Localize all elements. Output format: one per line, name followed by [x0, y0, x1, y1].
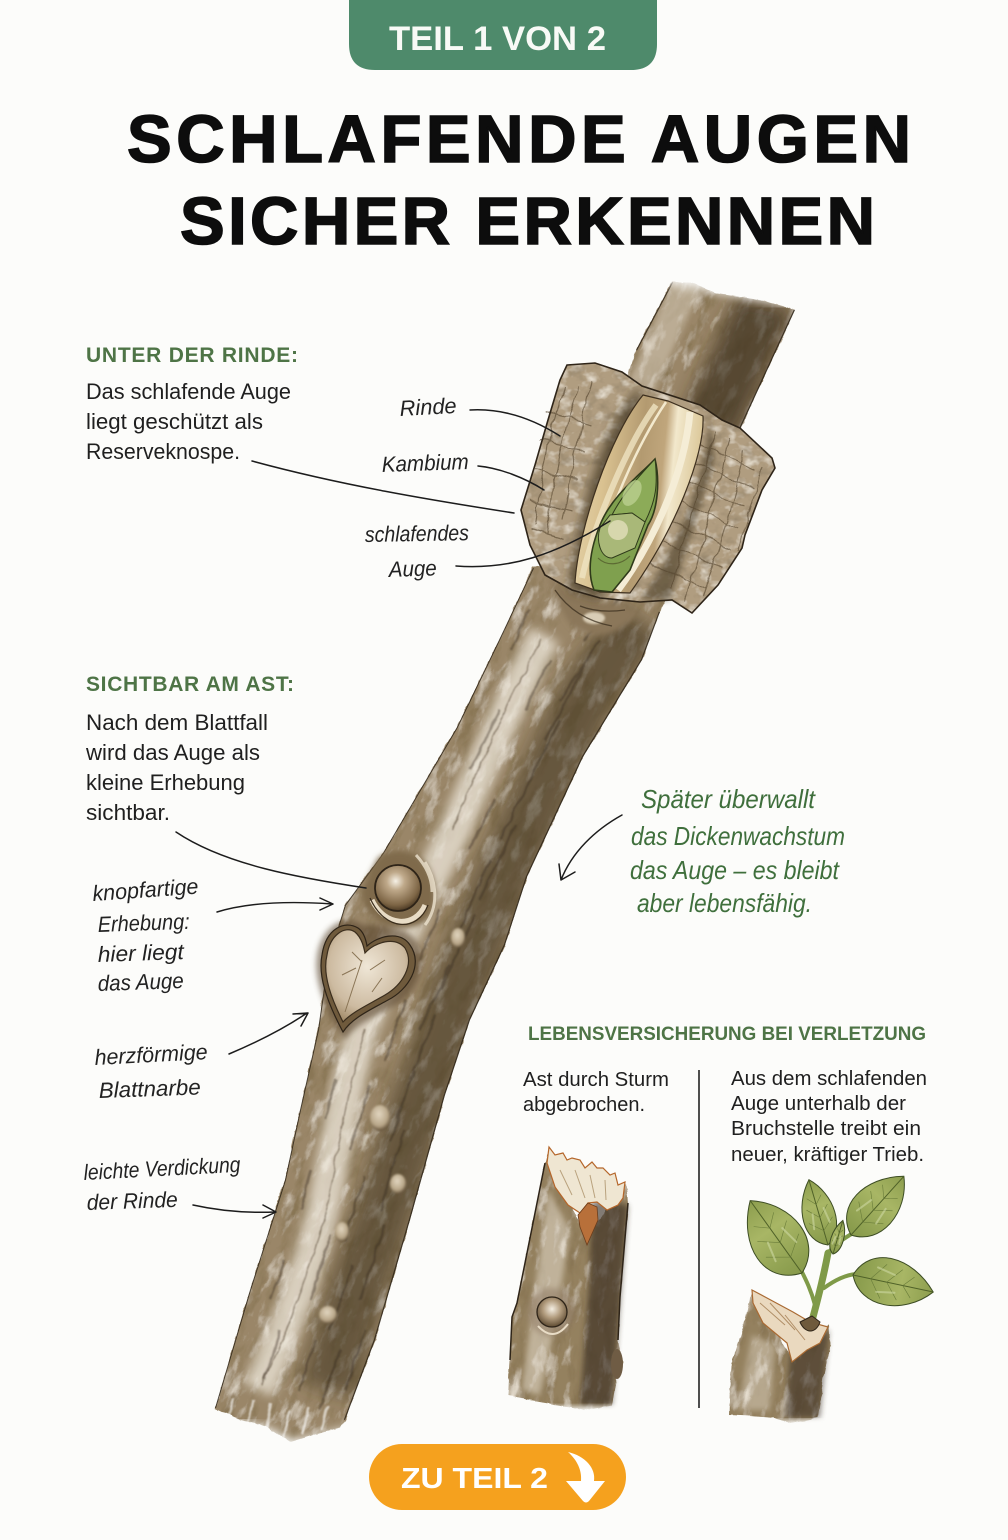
- title: [127, 102, 911, 259]
- leaves: [728, 1161, 938, 1314]
- label: herzförmige Blattnarbe: [94, 1013, 308, 1103]
- button: Zu Teil 2: ZU TEIL 2: [401, 1463, 548, 1495]
- label: schlafendes Auge: Auge: [386, 555, 437, 582]
- text block: Sichtbar am Ast: sichtbar.: [86, 800, 170, 825]
- text block: Unter der Rinde: liegt geschützt als: [86, 409, 263, 434]
- divider: [698, 1070, 700, 1408]
- right caption: neuer, kräftiger Trieb.: [731, 1144, 924, 1166]
- label: knopfartige Erhebung: knopfartige: [92, 874, 199, 906]
- right caption: Bruchstelle treibt ein: [731, 1118, 921, 1140]
- branch body: [215, 282, 795, 1442]
- text block: Sichtbar am Ast: kleine Erhebung: [86, 770, 245, 795]
- badge: Teil 1 von 2: [349, 0, 657, 70]
- section heading: LEBENSVERSICHERUNG BEI VERLETZUNG: [528, 1023, 926, 1045]
- stump: [729, 1290, 830, 1423]
- label: knopfartige Erhebung: hier liegt: [97, 939, 185, 967]
- right caption: Auge unterhalb der: [731, 1093, 906, 1115]
- title: SICHER ERKENNEN: [180, 184, 875, 259]
- text block: Sichtbar am Ast: [85, 673, 294, 825]
- label: herzförmige Blattnarbe: Blattnarbe: [98, 1074, 201, 1103]
- left caption: Ast durch Sturm: [523, 1069, 669, 1091]
- feathered branch ends: [200, 276, 800, 1458]
- dormant bud: [590, 459, 658, 592]
- shoot stem: [810, 1253, 828, 1328]
- bark flap: cut open: [521, 363, 775, 613]
- button: Zu Teil 2: [369, 1444, 626, 1510]
- right caption: [731, 1068, 927, 1166]
- text block: Sichtbar am Ast: wird das Auge als: [85, 740, 260, 765]
- green note with arrow: das Auge – es bleibt: [630, 855, 841, 885]
- bark streaks dark: [265, 590, 625, 1410]
- exposed wood: [575, 395, 703, 593]
- label: Rinde: [399, 393, 560, 436]
- label: knopfartige Erhebung: das Auge: [97, 968, 184, 996]
- left caption: abgebrochen.: [523, 1094, 645, 1116]
- badge: Teil 1 von 2: TEIL 1 VON 2: [389, 20, 606, 58]
- text block: Sichtbar am Ast: SICHTBAR AM AST:: [86, 673, 294, 696]
- label: Kambium: Kambium: [381, 449, 469, 477]
- text block: Unter der Rinde: [86, 344, 298, 464]
- label: leichte Verdickung der Rinde: [83, 1152, 276, 1218]
- collar below flap: [548, 575, 640, 635]
- label: knopfartige Erhebung: Erhebung:: [97, 909, 190, 937]
- bud swelling: knob: [362, 851, 436, 928]
- label: schlafendes Auge: [365, 520, 610, 582]
- text block: Unter der Rinde: Das schlafende Auge: [86, 379, 291, 404]
- text block: Unter der Rinde: Reserveknospe.: [86, 439, 240, 464]
- label: Rinde: Rinde: [399, 393, 457, 421]
- text block: Sichtbar am Ast: Nach dem Blattfall: [86, 710, 268, 735]
- label: schlafendes Auge: schlafendes: [365, 520, 469, 547]
- label: leichte Verdickung der Rinde: der Rinde: [86, 1187, 178, 1215]
- right caption: Aus dem schlafenden: [731, 1068, 927, 1090]
- flap shading and cracks: [568, 385, 640, 600]
- icon: arrow down: [566, 1452, 605, 1502]
- text block: Unter der Rinde: UNTER DER RINDE:: [86, 344, 298, 367]
- heart-shaped leaf scar: [316, 920, 422, 1040]
- green note with arrow: aber lebensfähig.: [637, 888, 812, 918]
- bark nodules: [319, 928, 465, 1324]
- left caption: [523, 1069, 669, 1116]
- label: herzförmige Blattnarbe: herzförmige: [94, 1039, 208, 1070]
- green note with arrow: Später überwallt: [641, 784, 817, 814]
- title: SCHLAFENDE AUGEN: [127, 102, 911, 177]
- green note with arrow: das Dickenwachstum: [631, 821, 845, 851]
- label: Kambium: [381, 449, 544, 490]
- green note with arrow: [559, 784, 845, 918]
- bark streak center crack: [262, 640, 542, 1385]
- label: leichte Verdickung der Rinde: leichte Verdickung: [83, 1152, 242, 1185]
- leader lines for text blocks: [176, 461, 514, 888]
- label: knopfartige Erhebung: [92, 874, 333, 996]
- main branch illustration: [200, 276, 800, 1458]
- new shoot on stump: [725, 1161, 938, 1426]
- section: Lebensversicherung bei Verletzung: [500, 1023, 938, 1426]
- branch shading: [215, 282, 795, 1420]
- broken branch: [500, 1147, 628, 1414]
